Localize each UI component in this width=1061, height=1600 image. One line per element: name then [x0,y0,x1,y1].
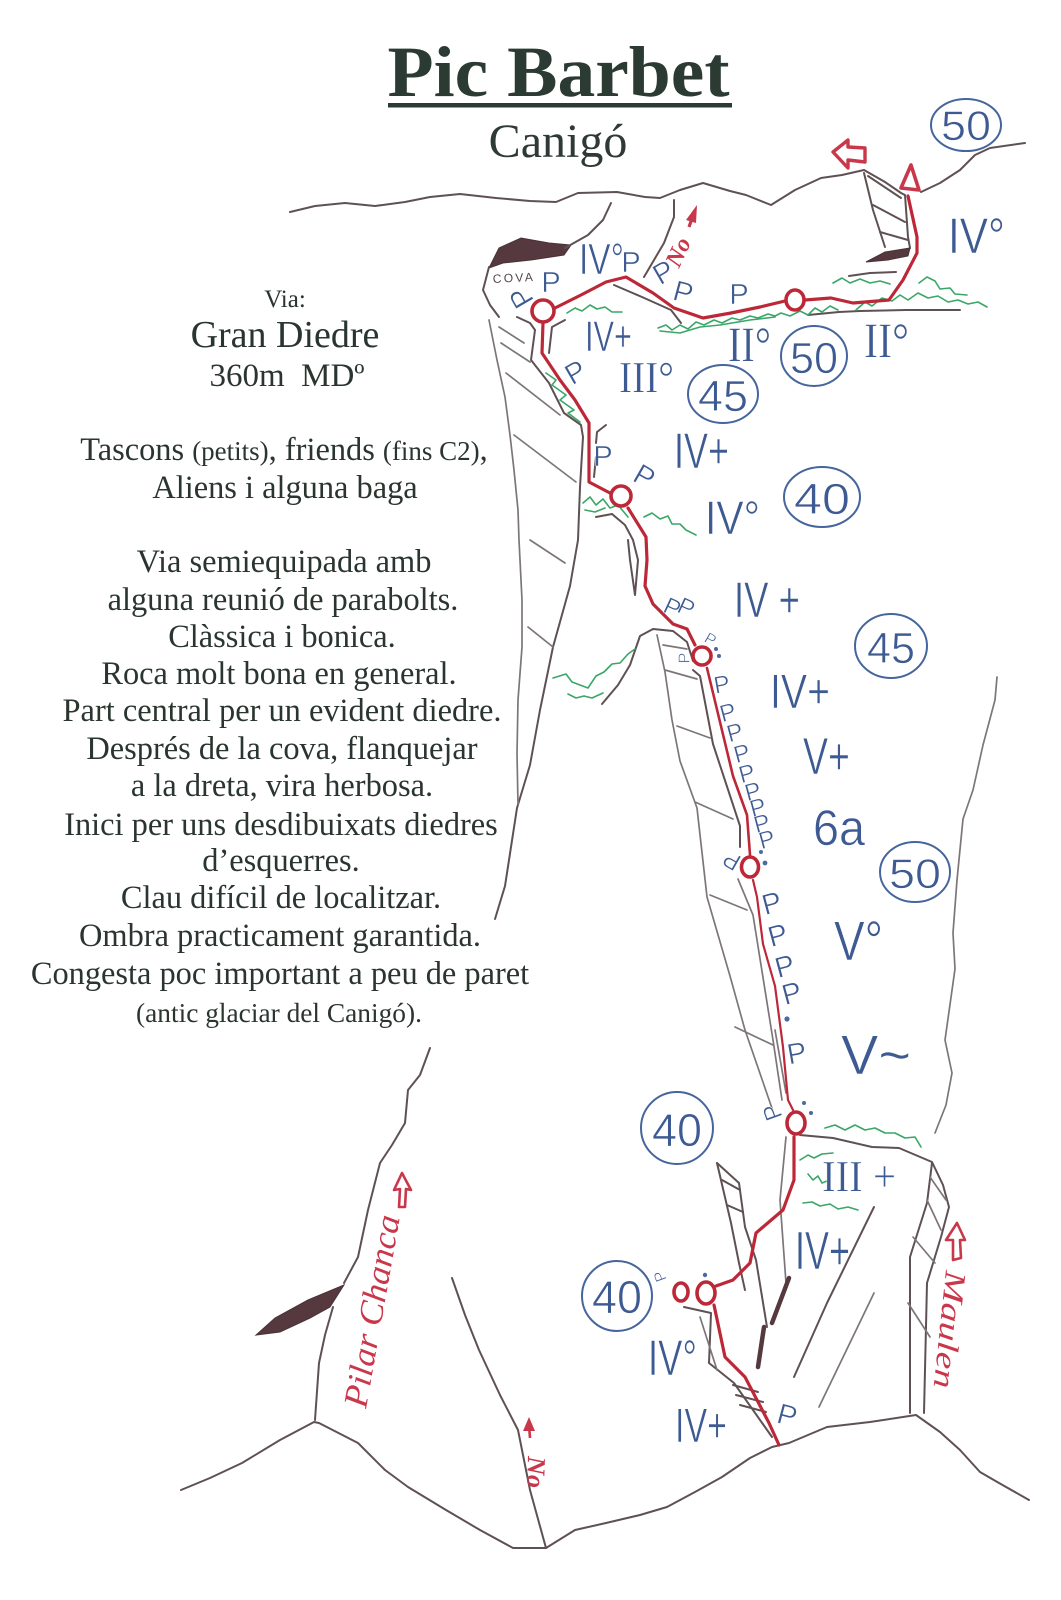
route info text: d’esquerres. [202,843,360,879]
base ridge [181,1415,1029,1548]
label: No lower: No [521,1455,551,1489]
route info text: Congesta poc important a peu de paret [31,956,529,992]
pitons [503,247,813,1434]
grades: V° [834,909,883,972]
grades [579,208,1005,1453]
pitons: P [756,825,778,855]
route info text: alguna reunió de parabolts. [108,582,458,618]
pitons: P [676,653,694,663]
climbing route [532,196,917,1445]
pitons: P [736,759,758,789]
grades: III + [822,1152,896,1201]
pitons: P [729,279,749,311]
pitons: P [712,670,732,700]
right wall and lower buttress [684,677,997,1437]
grades: IV + [734,572,800,628]
pitons: P [503,281,541,313]
pitch lengths: 45 [698,372,748,421]
grades: V~ [841,1023,911,1086]
exit arrows [833,140,919,190]
grades: IV+ [674,423,729,479]
pitons: P [785,1037,809,1071]
pitons: P [717,698,739,728]
pitch lengths: 40 [652,1104,702,1156]
grades: III° [619,353,674,402]
route info text: Inici per uns desdibuixats diedres [64,807,498,843]
pitons: P [759,886,785,922]
label: No upper: No [661,234,697,272]
pitch lengths: 45 [867,624,915,673]
label: cova: COVA [492,270,533,286]
pitons: P [718,844,746,876]
pitch lengths: 50 [790,334,838,383]
pitons: P [742,777,764,807]
pitons: P [670,275,696,311]
label: Maulen: Maulen [927,1268,972,1390]
subtitle: Canigó [489,115,627,168]
label: No lower [521,1417,551,1489]
pitons: P [772,949,798,985]
pitons: P [628,458,660,496]
grades: IV° [948,208,1005,264]
pitons: P [593,441,613,473]
grades: IV+ [585,313,632,361]
route info text: (antic glaciar del Canigó). [136,998,422,1028]
pitons: P [648,254,680,292]
pitons: P [747,793,769,823]
pitons: P [541,267,561,299]
pitons: P [724,718,746,748]
route info text: Via semiequipada amb [137,544,431,580]
route info text: Ombra practicament garantida. [79,918,481,954]
left buttress and dark ledge [256,1048,546,1548]
pitch lengths: 40 [592,1271,642,1323]
grades: 6a [813,800,865,856]
grades: V+ [803,728,850,786]
label: Maulen [927,1223,972,1390]
pitons: P [765,918,791,954]
route info text: Aliens i alguna baga [152,470,418,506]
grades: IV° [705,491,760,544]
route info text: Clàssica i bonica. [168,619,396,655]
pitons: P [701,630,719,650]
pitch lengths: 50 [941,102,991,149]
pitons: P [758,1100,788,1124]
grades: II° [864,312,909,368]
pitons: P [659,592,685,624]
grades: IV+ [795,1221,850,1281]
belays [532,290,805,1304]
pitons: P [751,809,773,839]
route info text: Part central per un evident diedre. [63,693,501,729]
pitch lengths: 50 [889,850,941,897]
route info text: 360m MDº [209,358,365,394]
route info text: Gran Diedre [191,314,379,356]
pitch lengths [582,99,1001,1331]
grades: II° [728,316,771,372]
pitons: P [731,739,753,769]
route info text: Després de la cova, flanquejar [86,731,478,767]
pitons: P [673,592,699,624]
pitons: P [774,1398,800,1434]
cave and upper wall [483,200,681,919]
vegetation [546,277,987,1210]
route info text: Clau difícil de localitzar. [121,880,441,916]
route info text [31,286,529,1028]
grades: IV+ [675,1400,727,1453]
pitch lengths: 40 [794,475,850,524]
route info text: Via: [264,286,306,313]
grades: IV° [579,235,624,284]
route info text: Tascons (petits), friends (fins C2), [80,432,488,468]
label: No upper [661,205,697,272]
grades: IV+ [770,666,830,719]
pitons: P [621,247,641,279]
pitons: P [651,1268,671,1284]
route info text: a la dreta, vira herbosa. [131,768,433,804]
pitons: P [779,976,805,1012]
label: Pilar Chanca: Pilar Chanca [337,1212,408,1411]
rock outlines: summit ridge [290,143,1025,315]
route info text: Roca molt bona en general. [101,656,457,692]
title: Pic Barbet [388,32,730,112]
central pillar and dihedral [602,629,786,1283]
grades: IV° [648,1330,697,1386]
pitons: P [560,354,592,392]
